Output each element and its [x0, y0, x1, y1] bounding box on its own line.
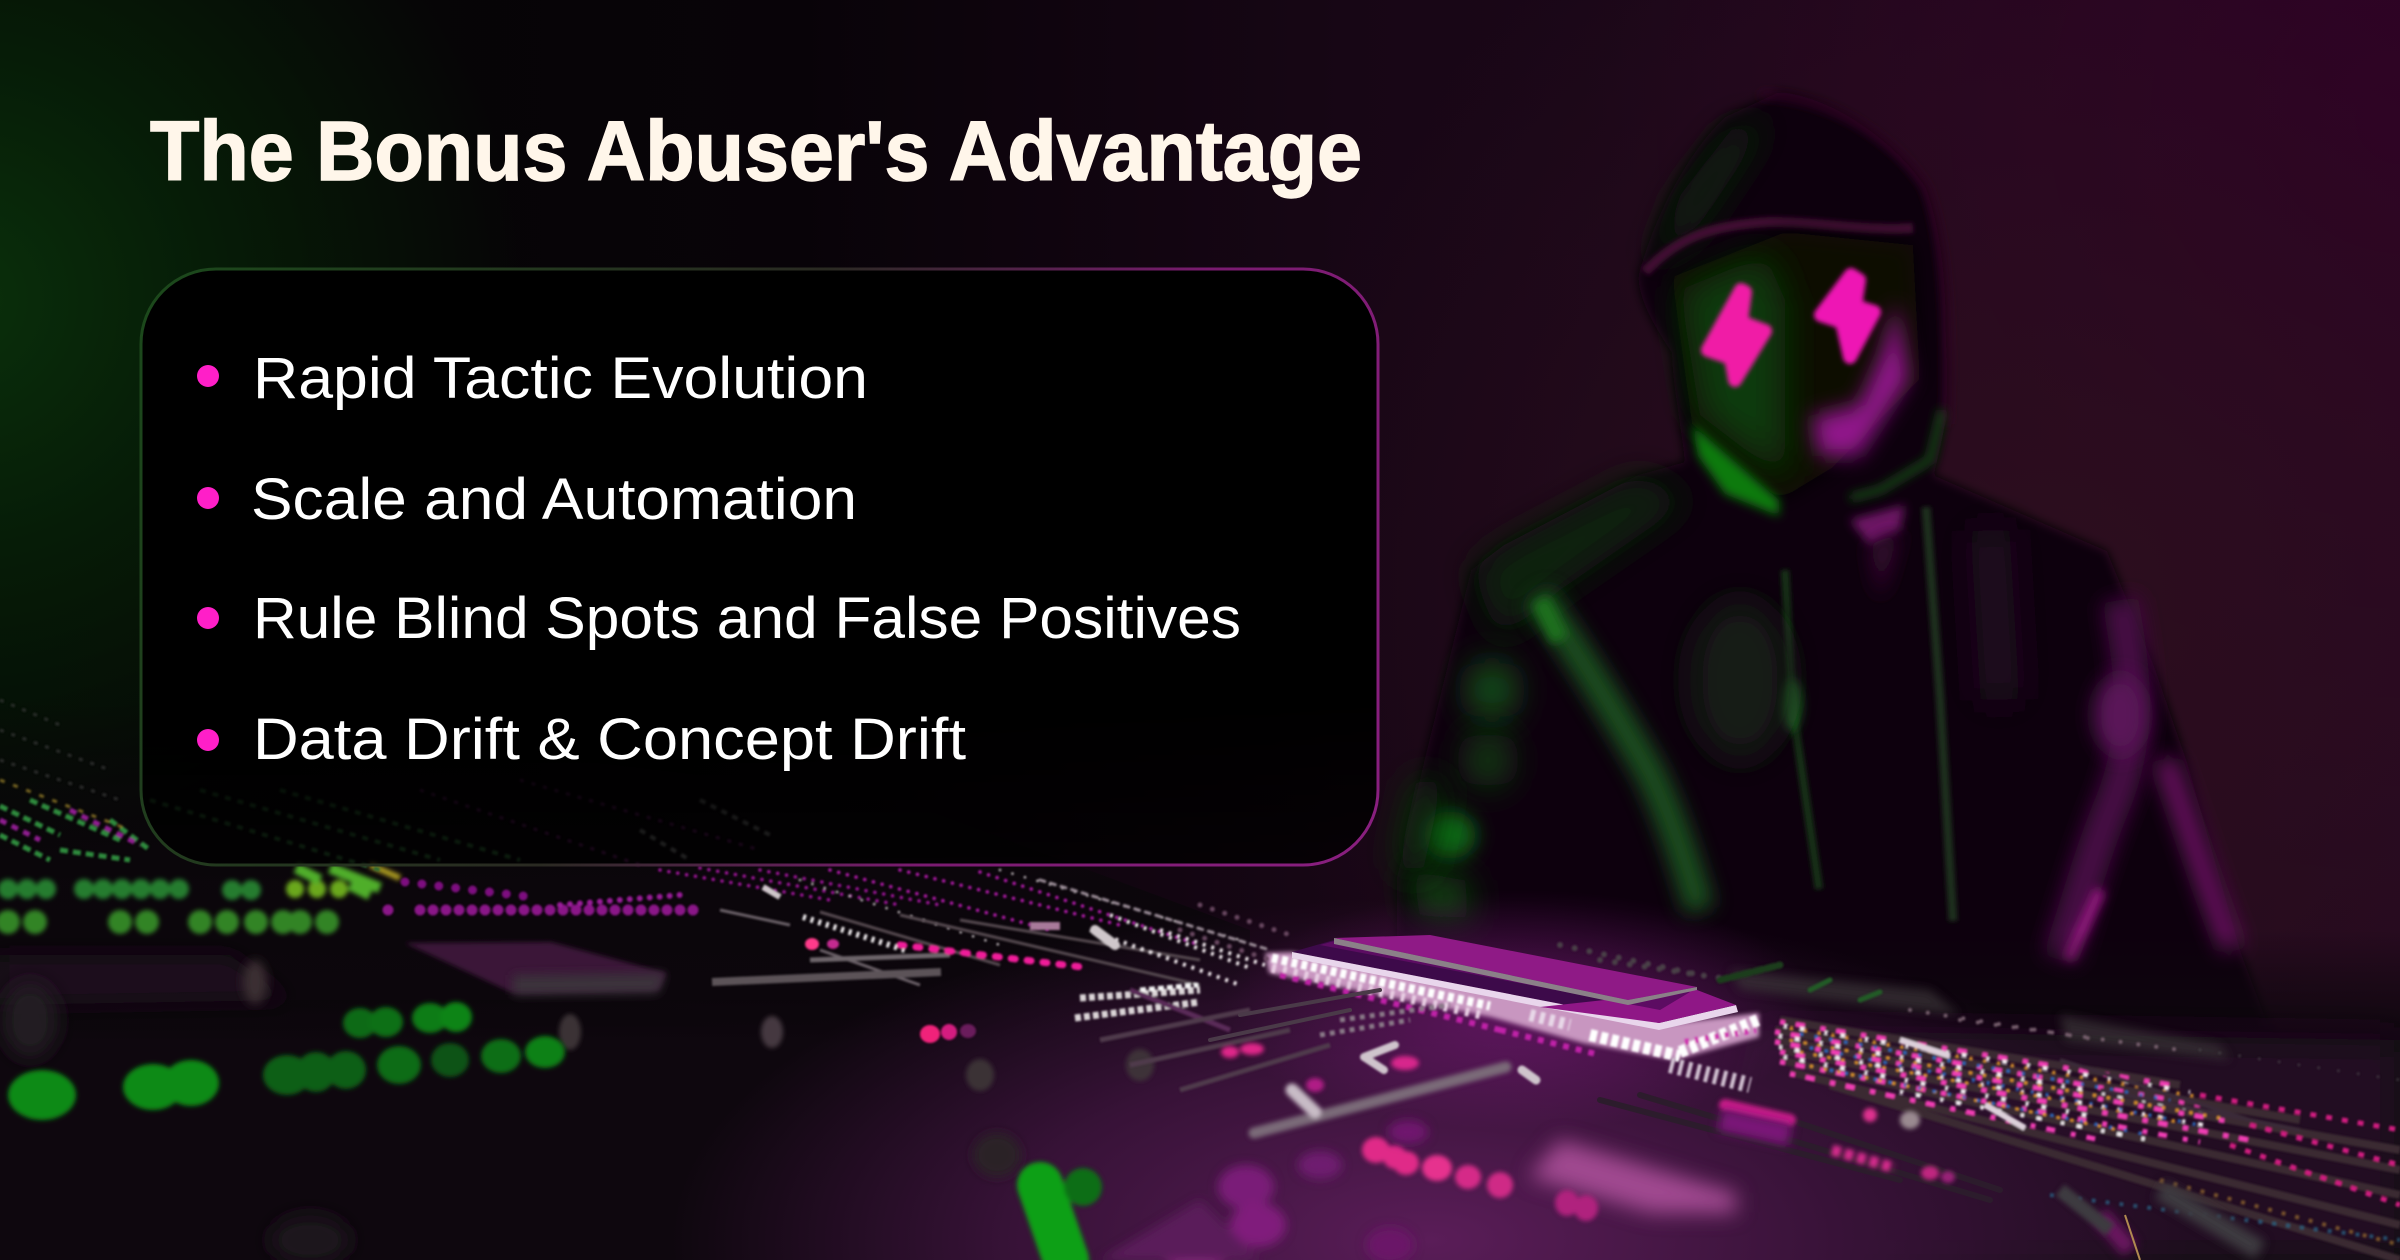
pink bokeh near center: [805, 938, 976, 1043]
central traces: [712, 887, 1330, 1090]
face: [1672, 232, 1920, 500]
dark components behind traces: [1730, 970, 2230, 1060]
figure: hooded hacker: [1397, 92, 2281, 1140]
green shoulder wash: [1471, 475, 1690, 640]
chest haze: [1690, 600, 1790, 760]
chip: layered heat spreader: [1292, 935, 1738, 1030]
green left side of face: [1680, 255, 1785, 480]
green neck highlight: [1692, 424, 1779, 516]
bullet: rapid tactic evolution: Rapid Tactic Evolution: [253, 346, 868, 411]
icon: lightning eye right: [1821, 275, 1874, 357]
panel: advantages list: [141, 269, 1378, 865]
bullet: data drift: Data Drift & Concept Drift: [253, 707, 966, 772]
white and lilac traces lower left of chip: [1210, 990, 2000, 1200]
magenta cheek: [1812, 302, 1909, 456]
drawstrings: [1926, 507, 1953, 921]
fine trace bands at left edge: [0, 700, 770, 870]
hood brim: [1645, 222, 1913, 272]
lower left blurred studs: [2, 982, 58, 1058]
title: The Bonus Abuser's Advantage: [150, 104, 1362, 198]
hood top rim glow: [1760, 95, 1947, 424]
bullet: scale and automation: Scale and Automation: [251, 467, 857, 532]
traces fanning right of chip: [1775, 1020, 2400, 1260]
purple component left: [405, 942, 666, 993]
chip pins texture: [1272, 958, 1758, 1056]
pink bokeh and blobs on the board: [1100, 1043, 2260, 1260]
circuit board floor: [0, 690, 2400, 1260]
hood green wash: [1650, 120, 1770, 270]
collar magenta: [1850, 505, 1905, 545]
panel background: [141, 269, 1378, 865]
bullet: rule blind spots: Rule Blind Spots and False Positives: [253, 586, 1241, 651]
big green blurred capsule: [1040, 1168, 1102, 1260]
speckle above chip: [1180, 905, 2400, 1080]
silhouette: [1397, 92, 2281, 1140]
small green bead rows: [8, 865, 400, 922]
magenta sleeve highlights: [2060, 600, 2132, 960]
green arm highlights: [1538, 596, 1700, 910]
hood right edge green: [1850, 410, 1942, 498]
magenta bead rows: [388, 868, 1270, 950]
icon: lightning eye left: [1708, 290, 1765, 380]
chip: bright pins: [1265, 952, 1759, 1060]
blurred green bead rows: [8, 1002, 565, 1120]
